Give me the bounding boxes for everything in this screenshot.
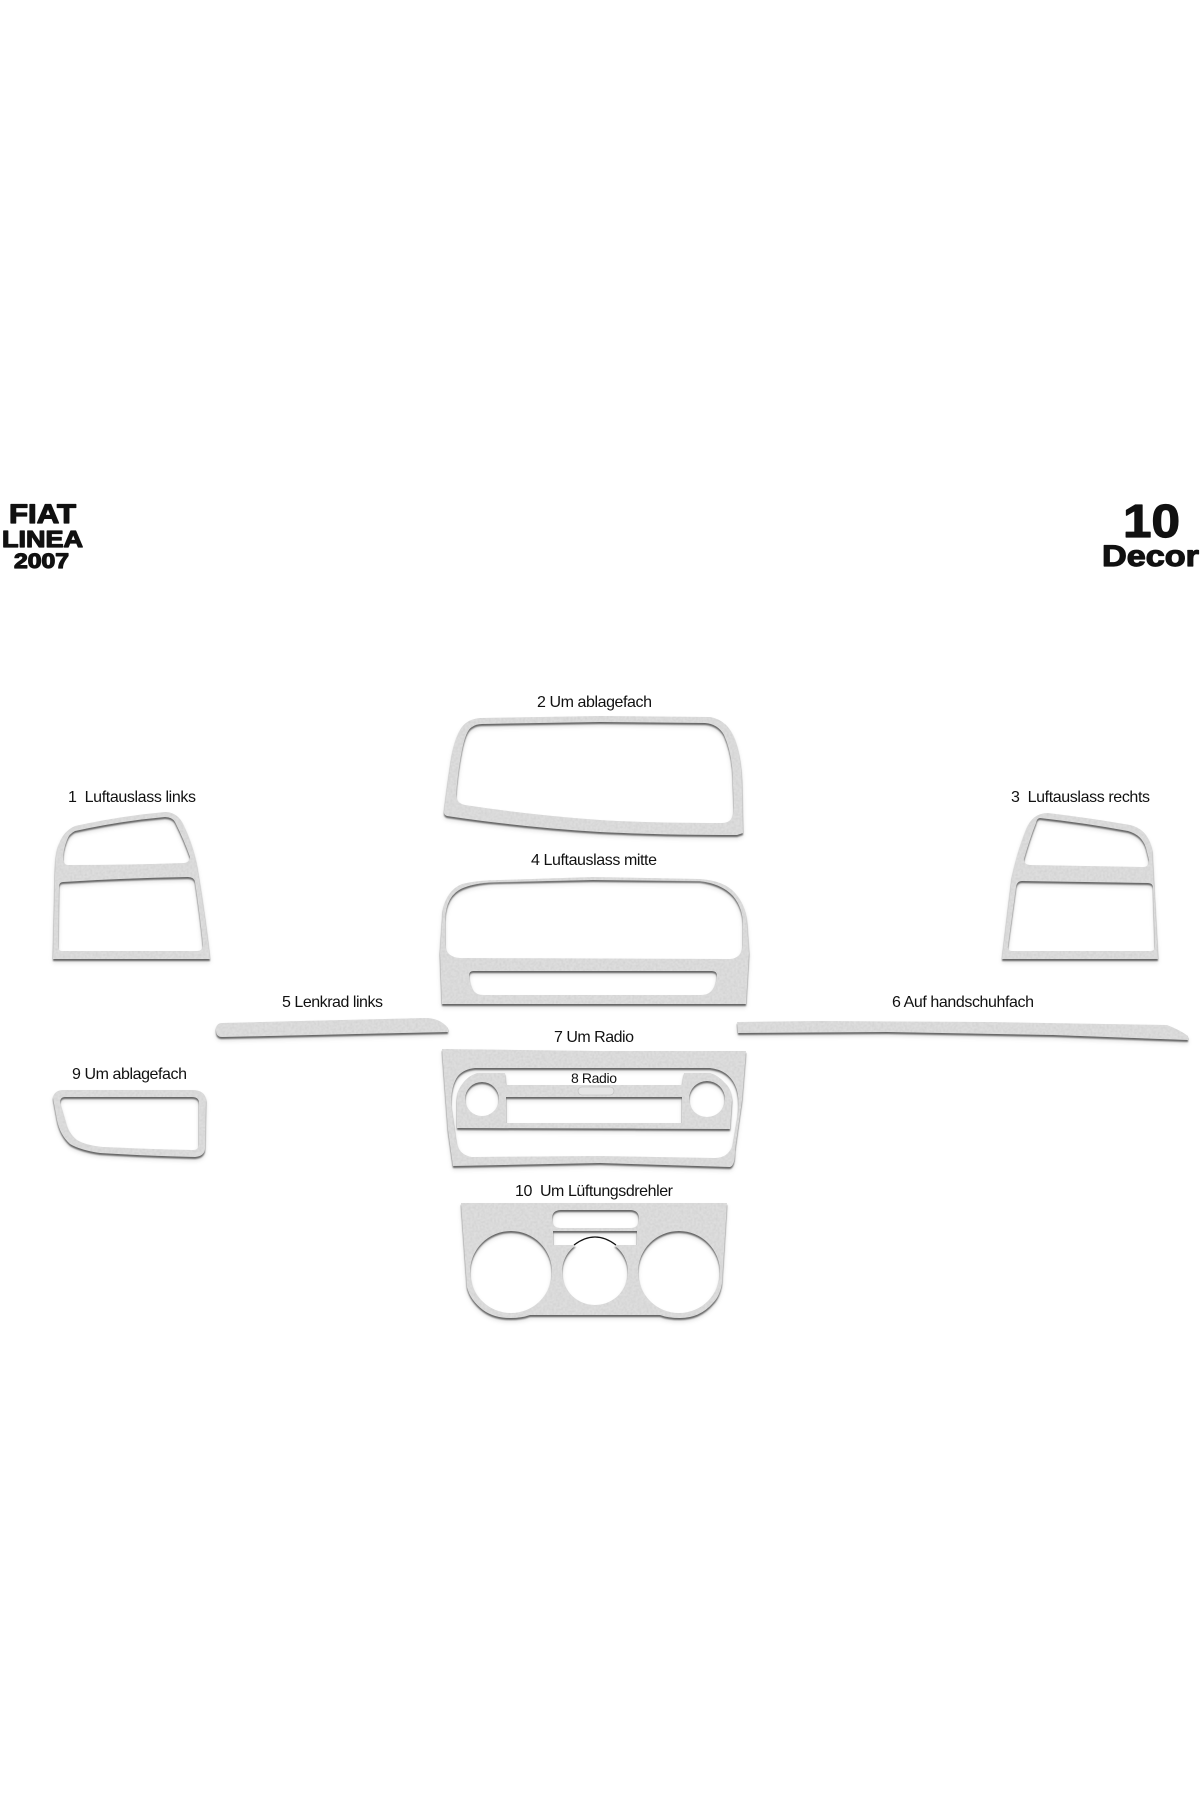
black arc above centre dial — [574, 1237, 616, 1245]
part 9: small storage surround: 9 Um ablagefach — [72, 1066, 187, 1083]
part 10: climate control dial surround — [461, 1183, 727, 1318]
part 8: radio faceplate — [457, 1070, 732, 1129]
part 2: storage compartment surround: 2 Um ablagefach — [537, 694, 652, 711]
part 10: climate control dial surround: 10 Um Lüftungsdrehler — [515, 1183, 674, 1200]
heading: piece count: Decor — [1102, 540, 1199, 573]
part 7: radio surround — [442, 1029, 746, 1167]
part 5: steering wheel left strip: 5 Lenkrad links — [282, 994, 383, 1011]
part 4: centre air vent trim — [440, 852, 749, 1004]
part 3: right air vent trim — [1002, 789, 1158, 959]
part 1: left air vent trim: 1 Luftauslass links — [68, 789, 196, 806]
part 6: glovebox strip — [737, 994, 1188, 1040]
heading: vehicle model: 2007 — [14, 550, 69, 573]
part 3: right air vent trim: 3 Luftauslass rechts — [1011, 789, 1150, 806]
part 5: steering wheel left strip — [216, 994, 448, 1037]
part 8: radio faceplate: 8 Radio — [571, 1070, 617, 1086]
part 2: storage compartment surround — [444, 694, 743, 835]
heading: piece count: 10 — [1123, 495, 1180, 547]
heading: vehicle model — [2, 499, 83, 573]
part 1: left air vent trim — [53, 789, 210, 959]
part 7: radio surround: 7 Um Radio — [554, 1029, 634, 1046]
part 4: centre air vent trim: 4 Luftauslass mitte — [531, 852, 657, 869]
heading: vehicle model: LINEA — [2, 526, 83, 552]
heading: piece count — [1102, 495, 1199, 573]
heading: vehicle model: FIAT — [9, 499, 77, 529]
part 9: small storage surround — [53, 1066, 206, 1157]
part 6: glovebox strip: 6 Auf handschuhfach — [892, 994, 1034, 1011]
